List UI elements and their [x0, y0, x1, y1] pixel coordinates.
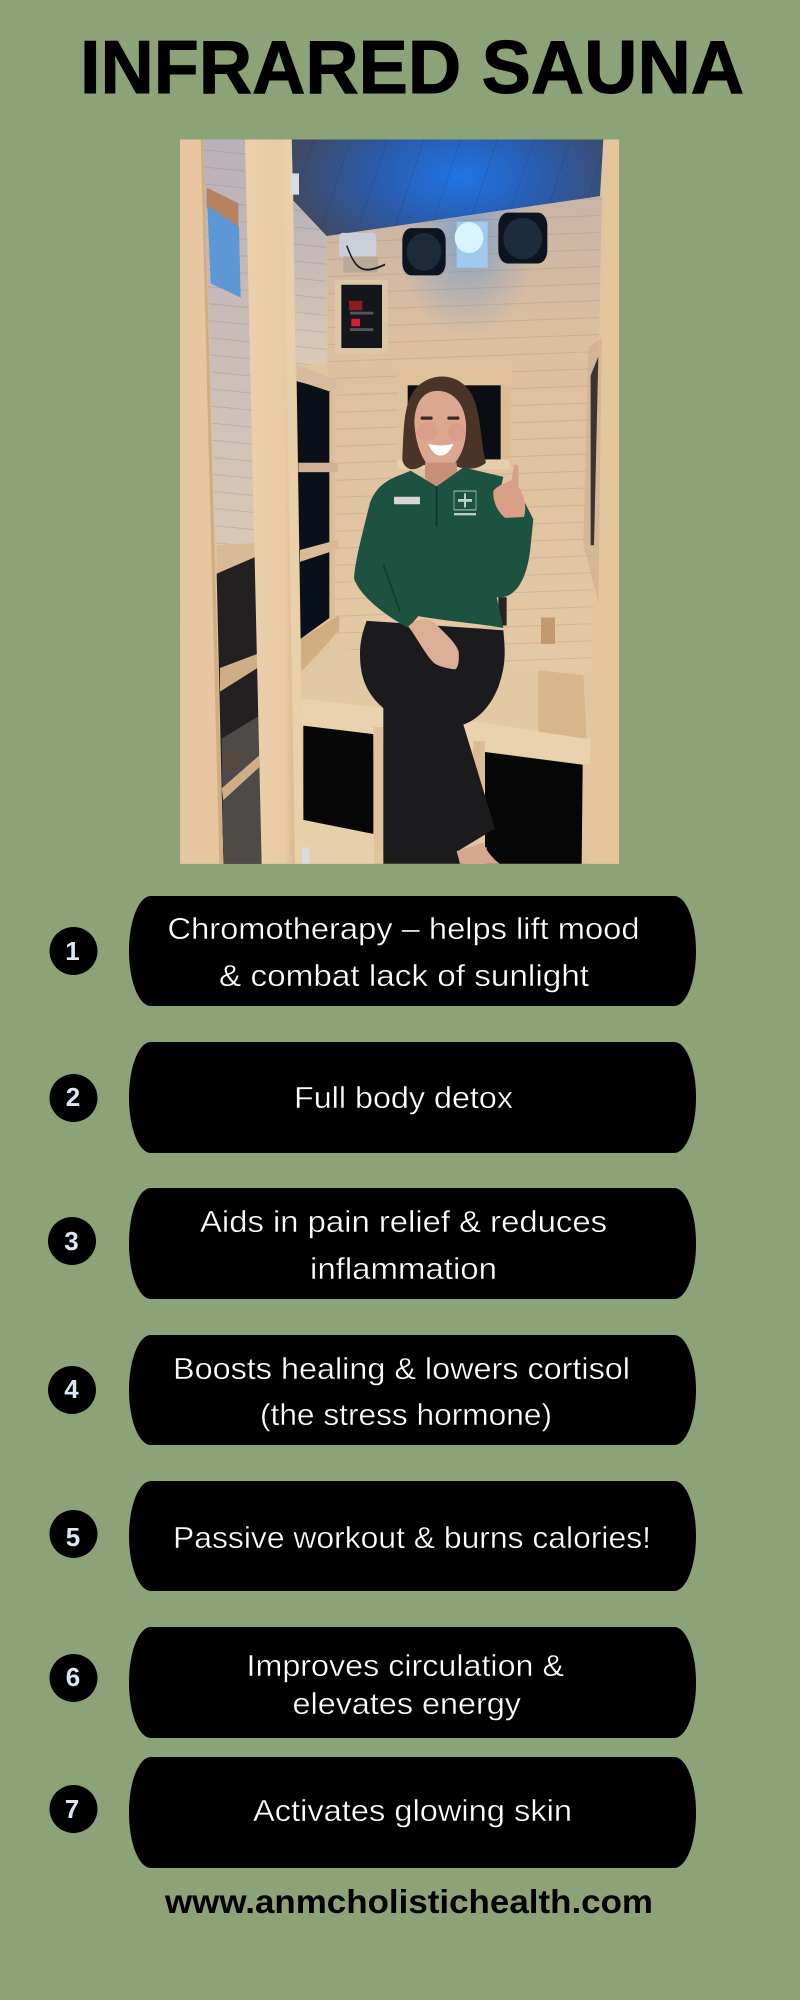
face — [414, 391, 466, 472]
pill 5 text: Passive workout & burns calories! — [173, 1520, 651, 1555]
photo: woman giving a thumbs up inside an infrared sauna — [180, 139, 619, 864]
rear panel behind head — [397, 367, 555, 644]
number badge 1: 1 — [65, 936, 80, 966]
pill 6 — [129, 1627, 696, 1738]
number badge 3 — [48, 1217, 96, 1265]
back wall — [327, 196, 602, 314]
number badge 7 — [50, 1785, 98, 1833]
thumbs up hand — [493, 464, 525, 518]
pill 5 — [129, 1481, 696, 1591]
jacket — [354, 467, 533, 628]
number badge 3: 3 — [64, 1226, 79, 1256]
ceiling — [292, 139, 603, 236]
item 5 — [50, 1481, 696, 1591]
title: INFRARED SAUNA — [80, 25, 744, 109]
number badge 4 — [48, 1366, 96, 1414]
pill 1 text — [168, 911, 640, 993]
pill 6 text — [246, 1648, 564, 1721]
pill 6 text: elevates energy — [292, 1686, 522, 1721]
left inner wall — [293, 201, 327, 366]
item 3 — [48, 1188, 696, 1299]
item 1 — [50, 896, 696, 1006]
item 2 — [50, 1042, 696, 1153]
pants — [360, 621, 505, 864]
pill 4 text — [173, 1351, 630, 1432]
number badge 2 — [50, 1074, 98, 1122]
number badge 6 — [50, 1654, 98, 1702]
number badge 4: 4 — [64, 1374, 79, 1404]
item 6 — [50, 1627, 696, 1738]
pill 1 text: & combat lack of sunlight — [219, 958, 589, 993]
door posts and frame — [180, 139, 619, 864]
number badge 1 — [50, 927, 98, 975]
pill 3 — [129, 1188, 696, 1299]
pill 2 text: Full body detox — [294, 1080, 514, 1115]
pill 7 — [129, 1757, 696, 1868]
pill 3 text: inflammation — [310, 1251, 497, 1286]
footer website: www.anmcholistichealth.com — [164, 1883, 653, 1920]
pill 4 — [129, 1335, 696, 1445]
pill 1 text: Chromotherapy – helps lift mood — [168, 911, 640, 946]
hair — [402, 377, 486, 469]
pill 3 text: Aids in pain relief & reduces — [200, 1204, 607, 1239]
pill 2 — [129, 1042, 696, 1153]
item 7 — [50, 1757, 696, 1868]
foot — [457, 843, 500, 864]
far left wall with poster — [203, 139, 262, 864]
number badge 5: 5 — [66, 1522, 80, 1552]
side infrared panel — [297, 365, 339, 672]
pill 1 — [129, 896, 696, 1006]
number badge 2: 2 — [66, 1082, 80, 1112]
number badge 6: 6 — [66, 1662, 80, 1692]
pill 4 text: Boosts healing & lowers cortisol — [173, 1351, 630, 1386]
jacket logo — [454, 491, 476, 514]
name badge — [394, 497, 420, 504]
number badge 7: 7 — [65, 1794, 79, 1824]
bench — [302, 648, 591, 864]
item 4 — [48, 1335, 696, 1445]
pill 4 text: (the stress hormone) — [260, 1397, 552, 1432]
ceiling speakers and chromotherapy light — [339, 213, 547, 275]
pill 6 text: Improves circulation & — [246, 1648, 564, 1683]
woman — [354, 377, 533, 864]
control panel — [335, 280, 388, 354]
pill 7 text: Activates glowing skin — [253, 1793, 572, 1828]
pill 3 text — [200, 1204, 607, 1286]
number badge 5 — [50, 1510, 98, 1558]
lap hand — [408, 619, 459, 669]
